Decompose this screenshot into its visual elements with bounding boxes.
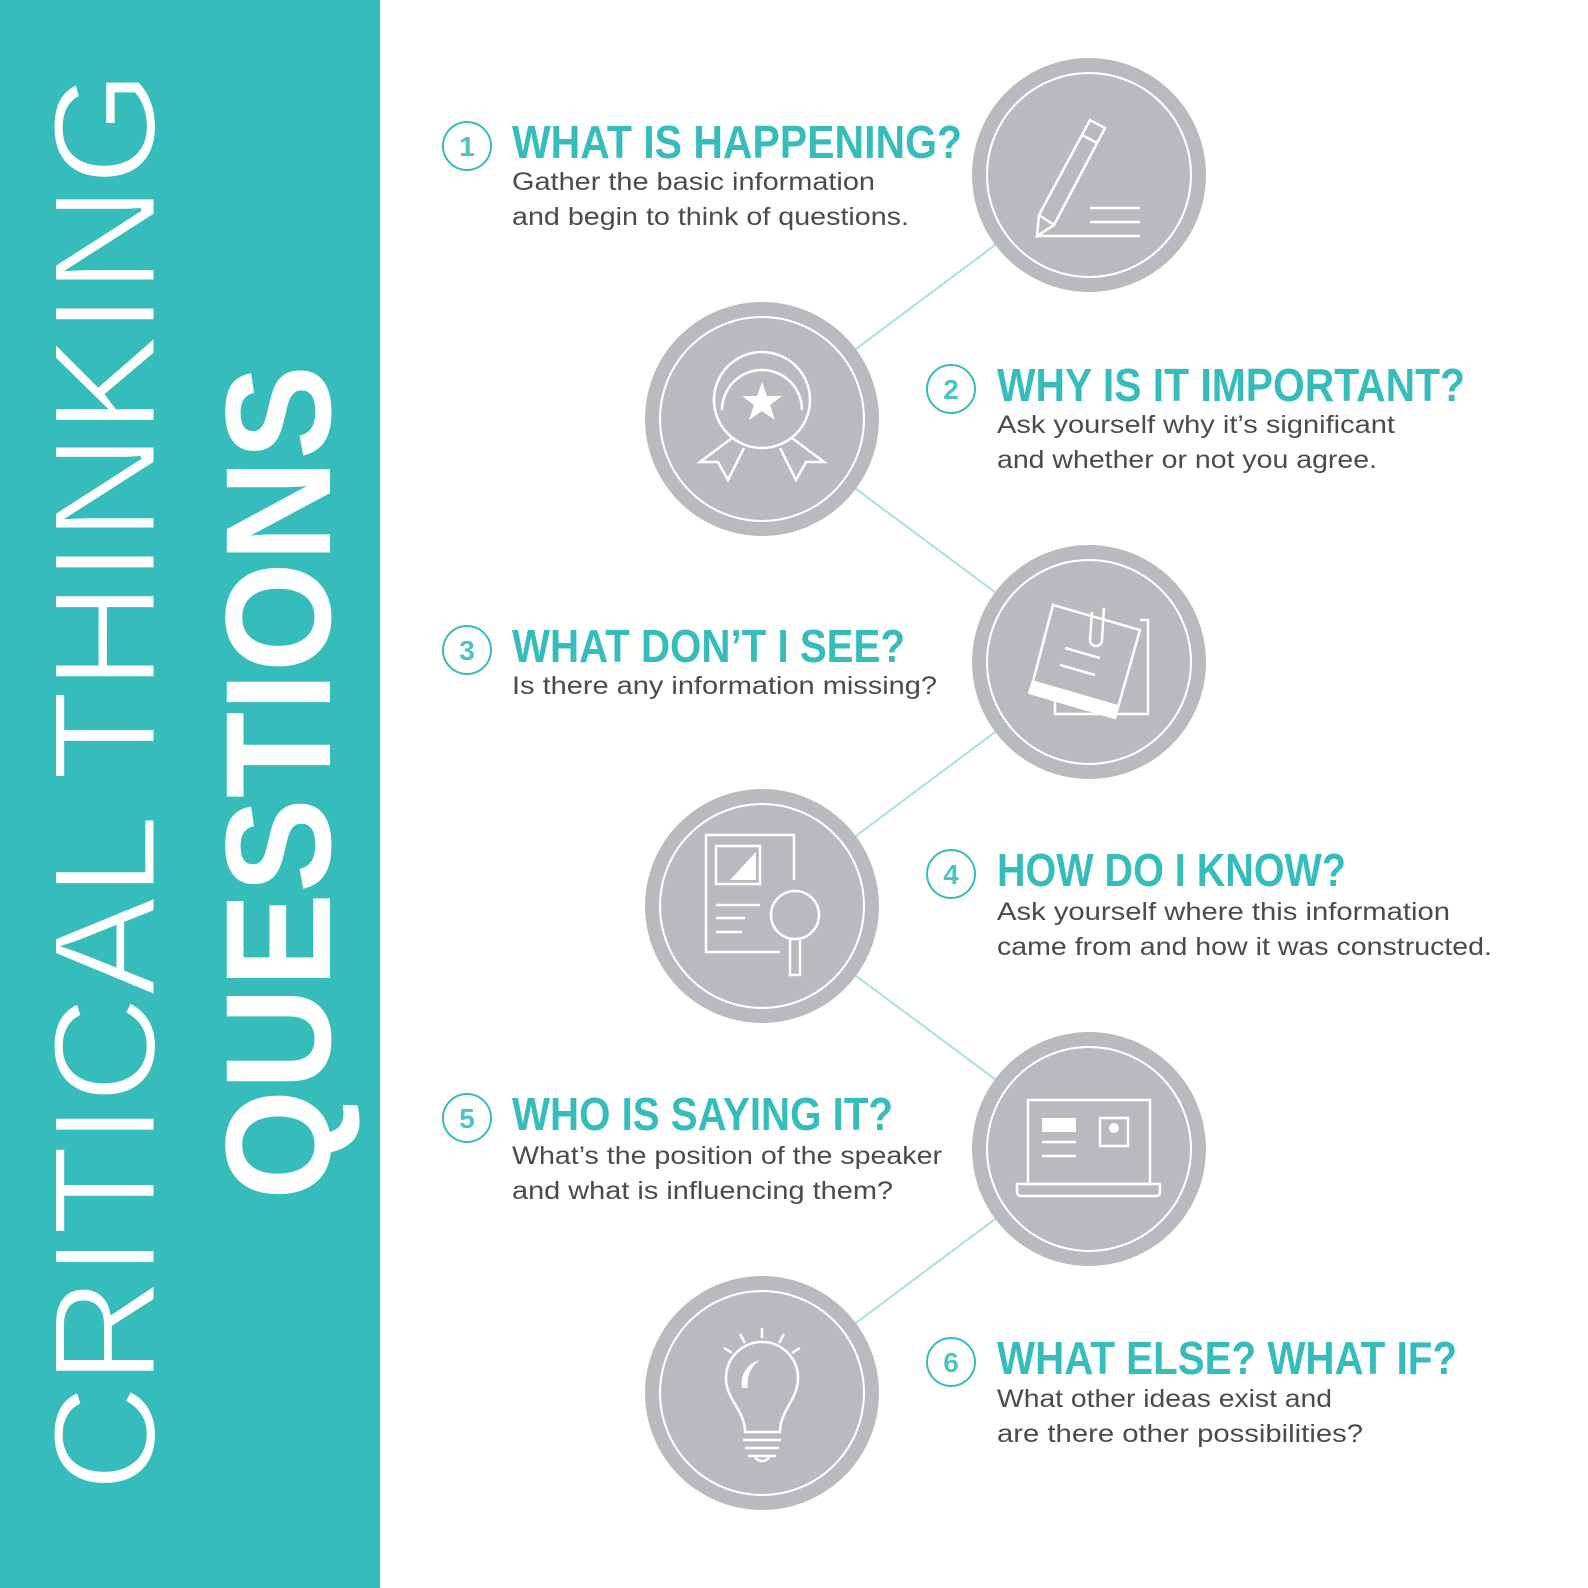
circle 3: documents icon <box>972 545 1206 779</box>
body texts: and whether or not you agree. <box>997 446 1377 474</box>
title: critical thinking: CRITICAL THINKING <box>23 70 186 1492</box>
text: 6 <box>943 1347 959 1378</box>
body texts: Is there any information missing? <box>512 672 937 700</box>
circle 5: laptop icon <box>972 1032 1206 1266</box>
headings: WHY IS IT IMPORTANT? <box>997 359 1465 411</box>
headings: WHAT IS HAPPENING? <box>512 116 962 168</box>
circle 6: light bulb icon <box>645 1276 879 1510</box>
sidebar <box>0 0 380 1588</box>
body texts: What’s the position of the speaker <box>512 1142 942 1170</box>
title: questions: QUESTIONS <box>194 365 362 1200</box>
circle 2: award icon <box>645 302 879 536</box>
connector lines <box>762 175 1089 1393</box>
body texts: Ask yourself why it’s significant <box>997 411 1395 439</box>
text: 2 <box>943 374 959 405</box>
circle 1: pencil icon <box>972 58 1206 292</box>
headings: WHO IS SAYING IT? <box>512 1088 893 1140</box>
body texts: Gather the basic information <box>512 168 875 196</box>
body texts: What other ideas exist and <box>997 1385 1332 1413</box>
body texts <box>512 168 1492 1448</box>
headings: WHAT ELSE? WHAT IF? <box>997 1332 1457 1384</box>
text: 1 <box>459 131 475 162</box>
headings: WHAT DON’T I SEE? <box>512 620 905 672</box>
text: 4 <box>943 859 959 890</box>
headings <box>512 116 1465 1384</box>
headings: HOW DO I KNOW? <box>997 844 1346 896</box>
body texts: Ask yourself where this information <box>997 898 1450 926</box>
body texts: and begin to think of questions. <box>512 203 909 231</box>
body texts: came from and how it was constructed. <box>997 933 1492 961</box>
body texts: and what is influencing them? <box>512 1177 893 1205</box>
circle 4: document search icon <box>645 789 879 1023</box>
number badges <box>443 122 975 1386</box>
text: 3 <box>459 635 475 666</box>
body texts: are there other possibilities? <box>997 1420 1363 1448</box>
text: 5 <box>459 1103 475 1134</box>
